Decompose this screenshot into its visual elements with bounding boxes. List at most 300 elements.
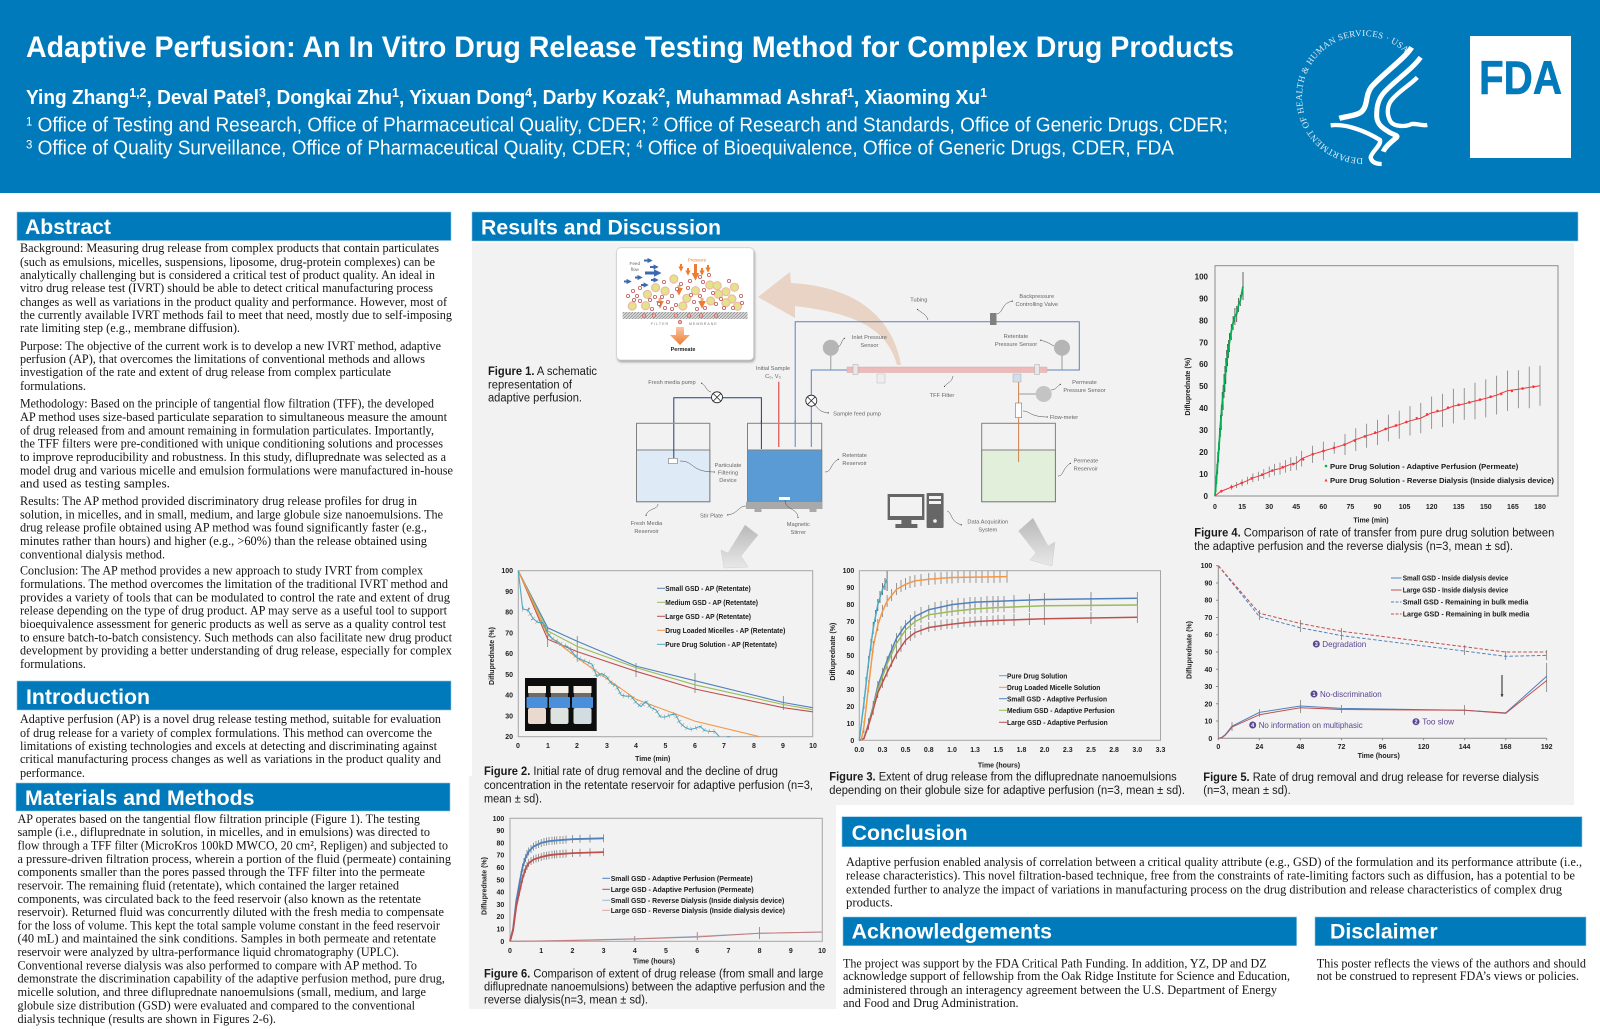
x axis tick labels: 180 <box>1534 504 1546 511</box>
x axis tick labels: 1.0 <box>947 747 957 754</box>
text: conclusion body <box>846 855 1582 910</box>
x axis tick labels: 7 <box>722 743 726 750</box>
text: introduction body: of drug release for a variety of complex formulations. This method can overcome the <box>20 726 432 740</box>
legend: Pure Drug Solution <box>1007 671 1067 680</box>
x axis tick labels: 3.0 <box>1132 747 1142 754</box>
text: abstract body: formulations. The method overcomes the limitation of the traditional IVRT method and <box>20 577 449 591</box>
heading: conclusion <box>842 817 1582 847</box>
x axis tick labels: 2 <box>575 743 579 750</box>
inset: filter membrane illustration: Pressure <box>688 258 707 262</box>
y axis tick labels: 90 <box>1205 580 1212 588</box>
text: abstract body: solution, in micelles, and in small, medium, and large globule size nanoemulsions. The <box>20 507 443 521</box>
text: methods body: reservoir). Returned fluid was concurrently diluted with the fresh media to compensate <box>18 905 444 919</box>
y axis tick labels: 30 <box>847 687 854 694</box>
text: methods body: a pressure-driven filtration process, wherein a portion of the fluid (permeate) containing <box>18 852 452 866</box>
logo: FDA <box>1470 36 1571 158</box>
schematic labels: Controlling Valve <box>1016 302 1058 308</box>
text: methods body: sample (i.e., difluprednate in solution, in micelles, and in emulsions) was directed to <box>18 825 430 839</box>
y axis tick labels: 60 <box>1199 360 1209 369</box>
heading: results and discussion: Results and Discussion <box>481 217 721 240</box>
x axis tick labels: 72 <box>1338 744 1345 751</box>
x axis tick labels: 8 <box>752 743 756 750</box>
affiliations: Office of Research and Standards, Office of Generic Drugs, CDER; <box>658 115 1228 137</box>
stir plate and stirrer <box>746 497 822 512</box>
caption: figure 4: Figure 4. Comparison of rate of transfer from pure drug solution between <box>1194 528 1554 540</box>
schematic labels: Inlet Pressure <box>852 335 887 341</box>
affiliations: 2 <box>652 115 659 129</box>
y axis tick labels: 0 <box>1208 736 1212 743</box>
schematic labels: Fresh Media <box>631 521 663 527</box>
arrow: time marker <box>1501 675 1503 697</box>
x axis tick labels: 60 <box>1319 504 1327 511</box>
heading: acknowledgements <box>843 917 1297 946</box>
panel: materials and methods <box>16 783 452 1026</box>
text: methods body: components smaller than the pores passed through the TFF filter into the permeate <box>18 865 425 879</box>
text: acknowledgements body: acknowledge support of fellowship from the Oak Ridge Institute for Science and Education, <box>843 969 1290 983</box>
x axis tick labels: 1.5 <box>993 747 1003 754</box>
text: abstract body: Results: The AP method provided discriminatory drug release profiles for drug in <box>20 494 418 508</box>
x axis tick labels: 75 <box>1347 504 1354 511</box>
axis titles: Difluprednate (%) <box>482 857 488 915</box>
x axis tick labels: 2.3 <box>1063 747 1073 754</box>
y axis tick labels: 20 <box>505 734 513 741</box>
legend: Medium GSD - Adaptive Perfusion <box>1007 706 1115 715</box>
text: introduction body: performance. <box>20 766 85 780</box>
heading: results and discussion <box>472 212 1578 241</box>
caption: figure 3: Figure 3. Extent of drug release from the difluprednate nanoemulsions <box>829 772 1177 784</box>
schematic labels <box>631 294 1106 536</box>
figure 1: schematic <box>617 248 1106 536</box>
y axis tick labels: 100 <box>1195 272 1209 282</box>
heading: abstract: Abstract <box>25 216 111 239</box>
text: abstract body: the TFF filters were pre-conditioned with unique conditioning solutions and processes <box>20 437 443 451</box>
text: acknowledgements body: and Food and Drug Administration. <box>843 996 1019 1010</box>
schematic labels: Filtering <box>718 470 738 476</box>
annotation: no-discrimination: 1 <box>1312 692 1316 698</box>
inset: filter membrane illustration: Permeate <box>671 347 695 353</box>
x axis tick labels: 6 <box>695 948 699 955</box>
y axis tick labels <box>843 568 854 745</box>
legend: Large GSD - Inside dialysis device <box>1403 586 1508 595</box>
annotation: degradation: Degradation <box>1322 639 1367 649</box>
authors: , Deval Patel <box>146 87 259 109</box>
x axis tick labels: 4 <box>634 743 638 750</box>
axis titles: Time (hours) <box>1358 753 1400 760</box>
schematic labels: Permeate <box>1072 380 1097 386</box>
text: methods body: Conventional reverse dialysis was also performed to compare with AP method. To <box>18 959 417 973</box>
y axis tick labels: 70 <box>1199 338 1209 347</box>
schematic labels: Pressure Sensor <box>995 342 1037 348</box>
y axis tick labels: 90 <box>847 585 854 592</box>
text: abstract body: investigation of the rate and extent of drug release from complex particulate <box>20 365 391 379</box>
schematic labels: Flow-meter <box>1050 415 1078 421</box>
text: methods body: flow through a TFF filter (MicroKros 100kD MWCO, 20 cm², Repligen) and subjected to <box>18 839 448 853</box>
text: methods body: reservoir. The remaining fluid (retentate), which contained the larger retained <box>18 879 400 893</box>
text: abstract body: of drug released from and amount remaining in formulation particulates. Importantly, <box>20 423 434 437</box>
affiliations: 1 <box>26 115 33 129</box>
legend: Small GSD - AP (Retentate) <box>665 584 751 593</box>
caption: figure 6: reverse dialysis(n=3, mean ± sd). <box>484 995 648 1007</box>
heading: materials and methods <box>16 783 450 811</box>
caption: figure 2 <box>484 766 813 806</box>
text: abstract body: AP method uses size-based particulate separation to simultaneous measure the amount <box>20 410 447 424</box>
axis titles <box>1185 358 1389 524</box>
legend: Pure Drug Solution - Reverse Dialysis (Inside dialysis device) <box>1330 476 1555 485</box>
error bars <box>864 571 1137 733</box>
authors: 1 <box>980 85 987 100</box>
text: methods body: components, was circulated back to the feed reservoir (also known as the retentate <box>18 892 421 906</box>
axis titles: Time (hours) <box>978 762 1020 770</box>
legend: Drug Loaded Micelles - AP (Retentate) <box>665 626 786 635</box>
caption: figure 6 <box>484 969 825 1007</box>
y axis tick labels: 10 <box>847 721 854 728</box>
figure 5: reverse dialysis chart <box>1186 563 1553 760</box>
y axis tick labels: 80 <box>505 610 513 616</box>
y axis tick labels: 90 <box>497 828 504 835</box>
x axis tick labels: 135 <box>1453 504 1465 511</box>
text: methods body: globule size distribution (GSD) were evaluated and compared to the conventional <box>18 999 415 1013</box>
heading: introduction: Introduction <box>26 686 150 709</box>
y axis tick labels: 0 <box>850 738 854 745</box>
text: abstract body: the currently available IVRT methods fail to meet that need, mostly due to self-imposing <box>20 308 453 322</box>
x axis tick labels: 0 <box>1213 504 1217 511</box>
text: introduction body: limitations of existing technologies and excels at detecting and discriminating against <box>20 739 437 753</box>
y axis tick labels: 30 <box>1205 684 1212 691</box>
x axis tick labels: 5 <box>664 948 668 955</box>
affiliations: Office of Bioequivalence, Office of Generic Drugs, CDER, FDA <box>643 138 1175 160</box>
y axis tick labels: 10 <box>1205 718 1212 726</box>
text: methods body <box>18 812 452 1026</box>
caption: figure 6: difluprednate nanoemulsions) between the adaptive perfusion and the <box>484 982 825 994</box>
schematic labels: Sensor <box>860 343 879 349</box>
heading: disclaimer <box>1315 917 1586 946</box>
text: abstract body <box>20 241 453 671</box>
text: acknowledgements body: The project was support by the FDA Critical Path Funding. In addition, YZ, DP and DZ <box>843 956 1267 970</box>
x axis tick labels: 0.3 <box>878 747 887 754</box>
heading: disclaimer: Disclaimer <box>1330 920 1438 944</box>
x axis tick labels: 1 <box>539 948 543 955</box>
schematic labels: Backpressure <box>1019 294 1054 300</box>
y axis tick labels <box>501 568 513 741</box>
x axis tick labels: 144 <box>1459 744 1471 751</box>
schematic labels: Tubing <box>910 298 927 304</box>
lines entering reservoirs <box>674 420 1019 462</box>
arrow: grey arrow to figure 2 <box>721 525 758 568</box>
y axis tick labels: 80 <box>1199 316 1209 325</box>
y axis tick labels: 80 <box>497 840 504 847</box>
x axis tick labels: 96 <box>1379 744 1386 751</box>
legend <box>657 584 786 649</box>
x axis tick labels: 2.8 <box>1109 747 1119 754</box>
x axis tick labels <box>508 948 826 955</box>
x axis tick labels: 0.0 <box>854 747 864 754</box>
logo: HHS seal: DEPARTMENT OF HEALTH & HUMAN SERVICES · USA <box>1296 30 1408 164</box>
y axis tick labels: 50 <box>1205 650 1212 656</box>
error bars: reverse dialysis <box>1231 366 1540 490</box>
x axis tick labels: 45 <box>1292 504 1300 511</box>
axis titles <box>489 627 670 763</box>
x axis tick labels: 10 <box>809 743 817 750</box>
x axis tick labels: 0 <box>1216 744 1220 751</box>
annotation: too slow: 2 <box>1414 720 1418 726</box>
heading: introduction <box>17 681 451 710</box>
error bars: adaptive perfusion <box>1216 272 1243 492</box>
x axis tick labels: 5 <box>664 743 668 750</box>
panel: abstract <box>17 212 453 671</box>
y axis tick labels: 100 <box>493 816 504 823</box>
y axis tick labels: 90 <box>505 589 513 596</box>
x axis tick labels: 6 <box>693 743 697 750</box>
y axis tick labels: 30 <box>505 714 513 720</box>
caption: figure 3: depending on their globule size for adaptive perfusion (n=3, mean ± sd). <box>829 785 1185 797</box>
text: abstract body: minutes rather than hours) and higher (e.g., >60%) than the release obtained using <box>20 534 428 548</box>
data series <box>1218 566 1547 738</box>
caption: figure 2: concentration in the retentate reservoir for adaptive perfusion (n=3, <box>484 780 813 792</box>
inset: filter membrane illustration: FILTER <box>651 322 669 326</box>
x axis tick labels: 168 <box>1500 744 1512 751</box>
caption: figure 5: (n=3, mean ± sd). <box>1203 785 1291 797</box>
x axis tick labels: 9 <box>789 948 793 955</box>
inset: filter membrane illustration: MEMBRANE <box>689 322 718 326</box>
text: abstract body: perfusion (AP), that overcomes the limitations of conventional methods and allows <box>20 352 425 366</box>
reservoirs <box>636 423 1055 502</box>
x axis tick labels: 1.3 <box>970 747 980 754</box>
x axis tick labels <box>1213 504 1546 511</box>
tubing and flow lines <box>674 322 1079 462</box>
x axis tick labels: 3 <box>602 948 606 955</box>
schematic labels: Sample feed pump <box>833 412 881 418</box>
inset photo: nanoemulsion bottles <box>525 678 597 731</box>
schematic labels: Reservoir <box>634 529 659 535</box>
pumps <box>712 392 817 406</box>
x axis tick labels: 105 <box>1399 504 1411 511</box>
text: abstract body: (such as emulsions, micelles, suspensions, liposome, drug-protein complexes) can be <box>20 255 435 269</box>
x axis tick labels: 10 <box>818 948 826 955</box>
affiliations <box>26 115 1228 160</box>
text: abstract body: provides a variety of tools that can be modulated to control the rate and extent of drug <box>20 590 451 604</box>
x axis tick labels <box>854 747 1165 754</box>
text: abstract body: bioequivalence assessment for generic products as well as serve as a quality control test <box>20 617 446 631</box>
y axis tick labels: 70 <box>497 853 504 860</box>
figure 3: extent of release chart <box>830 568 1165 770</box>
x axis tick labels: 120 <box>1418 744 1430 751</box>
y axis tick labels: 40 <box>1205 667 1212 674</box>
y axis tick labels: 20 <box>847 704 854 711</box>
annotation: degradation: 3 <box>1315 642 1318 648</box>
legend <box>602 874 786 915</box>
icon: data acquisition computer <box>888 493 944 528</box>
affiliations: Office of Testing and Research, Office of Pharmaceutical Quality, CDER; <box>32 115 652 137</box>
legend: Large GSD - Reverse Dialysis (Inside dialysis device) <box>611 906 786 915</box>
legend <box>1324 462 1555 485</box>
x axis tick labels: 3 <box>605 743 609 750</box>
x axis tick labels: 150 <box>1480 504 1492 511</box>
x axis tick labels: 165 <box>1507 504 1519 511</box>
legend: Small GSD - Adaptive Perfusion <box>1007 694 1107 703</box>
y axis tick labels: 60 <box>847 636 854 643</box>
x axis tick labels: 2.0 <box>1040 747 1050 754</box>
text: abstract body: Methodology: Based on the principle of tangential flow filtration (TFF), the developed <box>20 397 435 411</box>
schematic labels: Retentate <box>842 453 867 459</box>
x axis tick labels: 1.8 <box>1017 747 1026 754</box>
error bars <box>516 834 760 941</box>
caption: figure 6: Figure 6. Comparison of extent of drug release (from small and large <box>484 969 823 981</box>
axis titles: Difluprednate (%) <box>1186 621 1194 679</box>
legend: Large GSD - Remaining in bulk media <box>1403 610 1530 619</box>
x axis tick labels: 0.8 <box>924 747 934 754</box>
y axis tick labels: 50 <box>1199 382 1209 391</box>
heading: conclusion: Conclusion <box>852 822 968 845</box>
legend: Small GSD - Remaining in bulk media <box>1403 598 1529 607</box>
y axis tick labels: 10 <box>497 926 504 934</box>
text: abstract body: model drug and various micelle and emulsion formulations were manufactured in-house <box>20 463 453 477</box>
legend: Pure Drug Solution - AP (Retentate) <box>665 640 778 649</box>
x axis tick labels: 0 <box>508 948 512 955</box>
schematic labels: Permeate <box>1073 458 1098 464</box>
text: acknowledgements body <box>843 956 1290 1010</box>
caption: figure 1 <box>488 366 597 405</box>
axis titles <box>1186 621 1400 760</box>
axis titles: Difluprednate (%) <box>830 623 837 681</box>
filtering device and flow meter <box>669 403 1022 464</box>
text: introduction body: critical manufacturing process changes as well as variations in the product quality and <box>20 752 442 766</box>
x axis tick labels: 0.5 <box>901 747 911 754</box>
schematic labels: Data Acquisition <box>967 520 1008 526</box>
text: introduction body: Adaptive perfusion (AP) is a novel drug release testing method, suitable for evaluation <box>20 712 442 726</box>
text: methods body: for the loss of volume. This kept the total sample volume constant in the feed reservoir <box>18 919 441 933</box>
y axis tick labels: 100 <box>843 568 854 575</box>
y axis tick labels: 40 <box>847 670 854 677</box>
figure 2: retentate chart <box>489 568 817 763</box>
y axis tick labels: 60 <box>505 651 513 658</box>
legend: Drug Loaded Micelle Solution <box>1007 683 1100 692</box>
y axis tick labels: 50 <box>847 653 854 660</box>
y axis tick labels: 20 <box>1199 448 1209 457</box>
y axis tick labels: 90 <box>1199 294 1209 303</box>
text: abstract body: drug release profile obtained using AP method was found significantly faster (e.g., <box>20 521 427 535</box>
authors: 1,2 <box>129 85 146 100</box>
authors: 2 <box>658 85 665 100</box>
text: methods body: micelle solution, and three difluprednate nanoemulsions (small, medium, and large <box>18 985 426 999</box>
caption: figure 5 <box>1203 772 1539 797</box>
text: abstract body: Conclusion: The AP method provides a new approach to study IVRT from complex <box>20 564 424 578</box>
x axis tick labels: 3.3 <box>1156 747 1165 754</box>
authors: 1 <box>847 85 854 100</box>
error bars <box>1232 610 1547 731</box>
heading: acknowledgements: Acknowledgements <box>852 920 1052 944</box>
y axis tick labels: 50 <box>497 877 504 884</box>
legend <box>1391 574 1530 619</box>
axis titles <box>482 857 675 966</box>
y axis tick labels: 0 <box>1204 492 1209 501</box>
schematic labels: Pressure Sensor <box>1063 388 1106 394</box>
authors: , Muhammad Ashraf <box>665 87 847 109</box>
y axis tick labels <box>493 816 504 946</box>
y axis tick labels: 60 <box>497 865 504 872</box>
text: abstract body: development by providing a better understanding of drug release, especially for complex <box>20 644 453 658</box>
y axis tick labels <box>1201 563 1212 743</box>
schematic labels: Magnetic <box>787 522 810 528</box>
y axis tick labels <box>1195 272 1209 501</box>
axis titles <box>830 623 1020 770</box>
axis titles: Time (min) <box>635 756 670 763</box>
x axis tick labels: 90 <box>1374 504 1381 511</box>
data series <box>859 577 1137 740</box>
x axis tick labels: 1 <box>546 743 550 750</box>
figure 6: AP vs dialysis chart <box>482 816 826 966</box>
y axis tick labels: 40 <box>505 692 513 700</box>
affiliations: 4 <box>636 138 643 152</box>
schematic labels: C₀, V₀ <box>765 374 782 380</box>
y axis tick labels: 10 <box>1199 470 1209 479</box>
caption: figure 1: Figure 1. A schematic <box>488 366 597 378</box>
heading: materials and methods: Materials and Methods <box>25 787 254 810</box>
text: abstract body: Background: Measuring drug release from complex products that contain particulates <box>20 241 439 255</box>
text: acknowledgements body: administered through an interagency agreement between the U.S. Department of Energy <box>843 983 1278 997</box>
text: conclusion body: extended further to analyze the impact of variations in manufacturing process on the drug distribution and release characteristics of complex drug <box>846 883 1563 897</box>
x axis tick labels: 0 <box>516 743 520 750</box>
x axis tick labels: 4 <box>633 948 637 955</box>
annotation: no information on multiphasic: No information on multiphasic <box>1259 720 1363 730</box>
text: methods body: reservoir were analyzed by ultra-performance liquid chromatography (UPLC). <box>18 945 399 959</box>
schematic labels: Stirrer <box>791 530 806 536</box>
panel: conclusion <box>842 817 1582 910</box>
caption: figure 3 <box>829 772 1185 797</box>
caption: figure 1: adaptive perfusion. <box>488 393 582 405</box>
text: abstract body: rate limiting step (e.g., membrane diffusion). <box>20 321 240 335</box>
authors: 1 <box>392 85 399 100</box>
x axis tick labels: 7 <box>726 948 730 955</box>
x axis tick labels: 8 <box>758 948 762 955</box>
text: conclusion body: Adaptive perfusion enabled analysis of correlation between a critical quality attribute (e.g., GSD) of the formulation and its performance attribute (i.e., <box>846 855 1582 869</box>
legend: Small GSD - Adaptive Perfusion (Permeate) <box>611 874 753 883</box>
schematic annotation leaders <box>646 301 1071 525</box>
y axis tick labels: 30 <box>1199 426 1209 435</box>
legend: Large GSD - Adaptive Perfusion <box>1007 718 1108 727</box>
y axis tick labels: 100 <box>1201 563 1212 570</box>
schematic labels: Retentate <box>1004 334 1028 340</box>
schematic labels: System <box>978 528 998 534</box>
legend: Large GSD - Adaptive Perfusion (Permeate) <box>611 885 754 894</box>
y axis tick labels: 70 <box>1205 615 1212 622</box>
data series <box>518 571 813 737</box>
text: abstract body: conventional dialysis method. <box>20 547 165 561</box>
legend: Small GSD - Inside dialysis device <box>1403 574 1508 583</box>
x axis tick labels: 192 <box>1541 744 1553 751</box>
text: abstract body: Purpose: The objective of the current work is to develop a new IVRT method, adaptive <box>20 339 441 353</box>
y axis tick labels: 40 <box>497 890 504 897</box>
x axis tick labels: 48 <box>1297 744 1304 751</box>
figure 4: rate of transfer chart <box>1185 266 1558 524</box>
x axis tick labels: 2.5 <box>1086 747 1096 754</box>
legend: Large GSD - AP (Retentate) <box>665 612 752 621</box>
text: abstract body: formulations. <box>20 379 86 393</box>
affiliations: 3 <box>26 138 33 152</box>
panel: introduction <box>17 681 451 780</box>
legend: Small GSD - Reverse Dialysis (Inside dialysis device) <box>611 896 785 905</box>
arrow: grey arrow to figure 3 <box>1018 518 1055 566</box>
y axis tick labels: 70 <box>505 630 513 638</box>
authors: , Yixuan Dong <box>399 87 525 109</box>
caption: figure 4: the adaptive perfusion and the reverse dialysis (n=3, mean ± sd). <box>1194 541 1513 553</box>
text: methods body: AP operates based on the tangential flow filtration principle (Figure 1). The testing <box>18 812 421 826</box>
caption: figure 4 <box>1194 528 1554 553</box>
y axis tick labels: 20 <box>1205 701 1212 708</box>
text: introduction body <box>20 712 442 780</box>
schematic labels: Stir Plate <box>700 514 723 520</box>
text: abstract body: vitro drug release test (IVRT) should be able to detect critical manufacturing process <box>20 281 433 295</box>
axis titles: Time (hours) <box>633 958 675 966</box>
